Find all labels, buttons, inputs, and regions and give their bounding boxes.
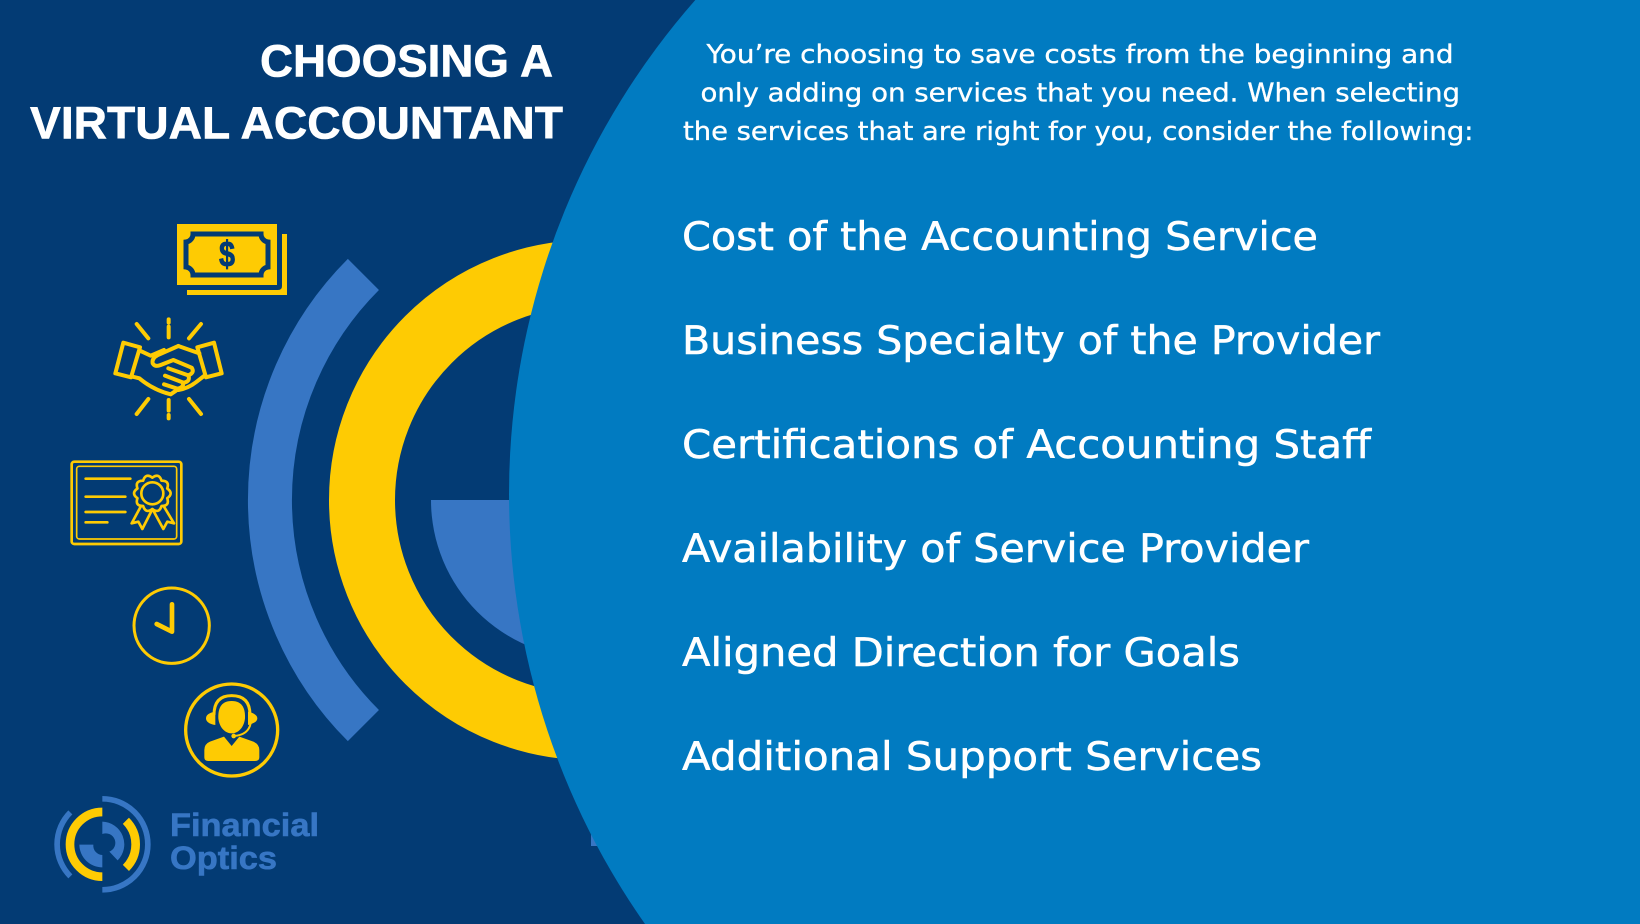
list of considerations: Availability of Service Provider [682, 527, 1310, 572]
intro paragraph [683, 40, 1474, 147]
yellow arc [362, 273, 589, 727]
title: CHOOSING A [260, 36, 553, 86]
icon: handshake [115, 319, 222, 418]
logo mark [57, 799, 148, 890]
outer blue arc [270, 274, 363, 726]
icon: clock [134, 588, 209, 663]
concentric arcs graphic [270, 273, 605, 846]
inner blue quarter sector [431, 500, 589, 658]
list of considerations: Cost of the Accounting Service [682, 215, 1318, 260]
logo: Financial Optics [57, 799, 319, 890]
list of considerations: Aligned Direction for Goals [682, 631, 1240, 676]
intro paragraph: You’re choosing to save costs from the beginning and [705, 40, 1454, 70]
logo wordmark: Optics [170, 840, 277, 876]
icon: money bills [177, 224, 287, 295]
intro paragraph: the services that are right for you, consider the following: [683, 117, 1474, 147]
list of considerations: Additional Support Services [682, 735, 1262, 780]
small blue sliver [591, 832, 605, 846]
icon: support agent with headset [186, 684, 278, 776]
list of considerations: Business Specialty of the Provider [682, 319, 1381, 364]
list of considerations: Certifications of Accounting Staff [682, 423, 1372, 468]
title [30, 36, 563, 148]
logo wordmark [170, 807, 319, 876]
logo wordmark: Financial [170, 807, 319, 843]
list of considerations [682, 215, 1381, 780]
icon: certificate [72, 462, 181, 544]
intro paragraph: only adding on services that you need. When selecting [700, 78, 1460, 108]
right blue panel [509, 0, 1640, 924]
icon: money bills: $ [219, 234, 235, 274]
title: VIRTUAL ACCOUNTANT [30, 98, 563, 148]
